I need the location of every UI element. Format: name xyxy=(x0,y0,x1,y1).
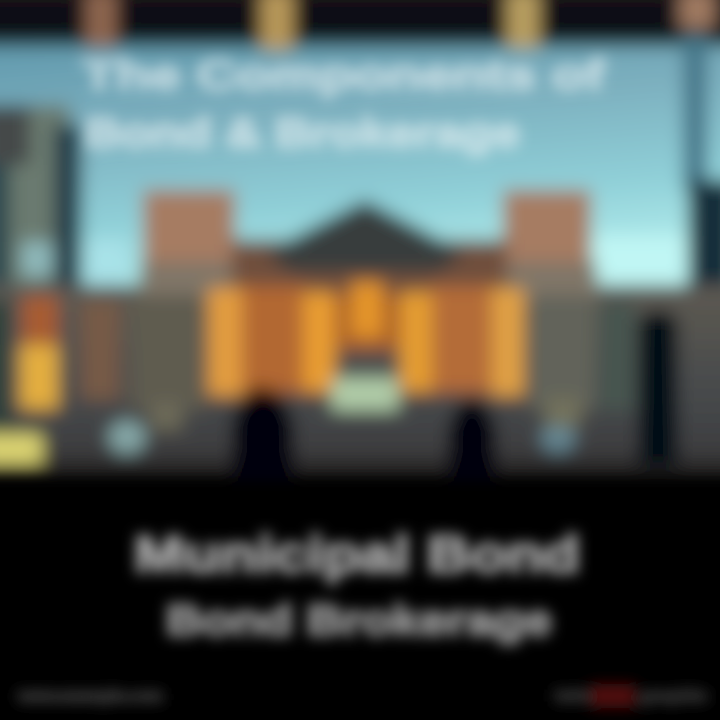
top title xyxy=(82,51,605,156)
footer right: graphic xyxy=(640,688,708,705)
bottom heading: Bond Brokerage xyxy=(166,596,552,645)
green glow xyxy=(332,378,398,410)
sky xyxy=(0,40,720,306)
footer right xyxy=(555,684,708,708)
scene: photo of municipal building xyxy=(0,0,720,500)
top title: The Components of xyxy=(82,51,605,98)
right tower xyxy=(594,35,720,315)
top title: Bond & Brokerage xyxy=(85,109,520,156)
dark ceiling band xyxy=(0,0,720,46)
ceiling lights xyxy=(86,0,714,50)
small lights xyxy=(0,398,580,464)
silhouettes xyxy=(232,310,678,500)
building wings and pediment xyxy=(0,190,635,450)
black lower panel xyxy=(0,481,720,720)
lit columns xyxy=(208,282,524,396)
bottom heading xyxy=(134,526,580,645)
lower building mass xyxy=(0,285,720,480)
footer left: www.example.com xyxy=(17,688,163,705)
left tower xyxy=(0,105,126,325)
left lit window xyxy=(20,296,58,409)
footer right: Info xyxy=(555,688,590,705)
bottom heading: Municipal Bond xyxy=(134,526,580,584)
